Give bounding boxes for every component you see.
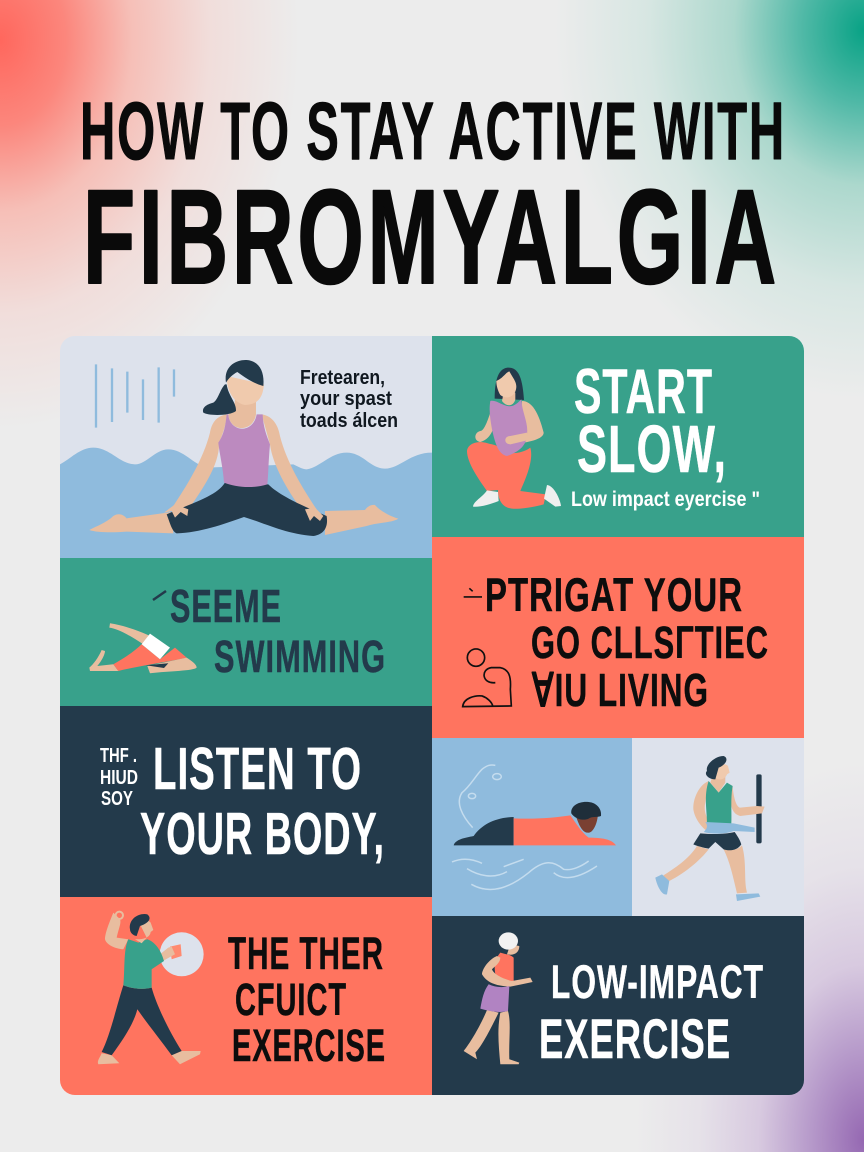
panel: therapeutic exercise [60, 897, 432, 1095]
figure: older adult walking [464, 932, 533, 1064]
heading: EXERCISE [232, 1020, 386, 1071]
heading: EXERCISE [539, 1007, 731, 1070]
icon: outlined person and marks [463, 588, 511, 707]
heading [487, 578, 768, 707]
subheading: Low impact eyercise " [571, 488, 760, 511]
caption text [300, 370, 397, 427]
heading: SLOW, [577, 412, 727, 487]
infographic canvas [60, 102, 804, 1095]
heading: CFUICT [235, 974, 347, 1025]
figure: person lying prone [454, 802, 616, 845]
heading: LISTEN TO [153, 736, 362, 802]
panel: listen to your body [60, 706, 432, 897]
heading [152, 589, 384, 673]
figure: person walking with ball [98, 912, 204, 1064]
panel: runner [632, 738, 804, 916]
heading: LOW-IMPACT [551, 955, 764, 1008]
heading: SWIMMING [214, 631, 386, 682]
heading: PTRIGAT YOUR [485, 568, 743, 621]
figure: stretching swimmer [89, 623, 197, 673]
figure: kneeling woman [467, 368, 561, 509]
small side label: THF . [100, 745, 137, 767]
figure: runner with pole [655, 756, 765, 901]
panel: start slow [432, 336, 804, 537]
small side label [100, 748, 138, 805]
panel: swimming [60, 558, 432, 706]
heading [575, 368, 724, 482]
heading: YOUR BODY, [140, 801, 385, 867]
heading: SEEME [170, 580, 282, 632]
title [80, 86, 786, 312]
heading [228, 937, 384, 1062]
figure: woman in seated straddle stretch [89, 360, 398, 536]
heading [140, 747, 382, 864]
panel: low-impact exercise [432, 916, 804, 1095]
small side label: SOY [101, 788, 133, 810]
water waves [60, 448, 432, 559]
caption text: Fretearen, [300, 367, 385, 389]
panel: integrate into living [432, 537, 804, 738]
rain lines [96, 364, 174, 428]
heading: ∀IU LIVING [531, 664, 709, 716]
heading [541, 964, 763, 1059]
heading: START [574, 357, 713, 427]
panel: seated stretch [60, 336, 432, 559]
panel: prone float [432, 738, 632, 916]
heading: THE THER [228, 928, 384, 979]
panel grid [60, 336, 804, 1095]
decorative water lines [452, 765, 597, 889]
caption text: toads álcen [300, 410, 398, 432]
caption text: your spast [300, 388, 392, 410]
small side label: HIUD [100, 767, 138, 789]
